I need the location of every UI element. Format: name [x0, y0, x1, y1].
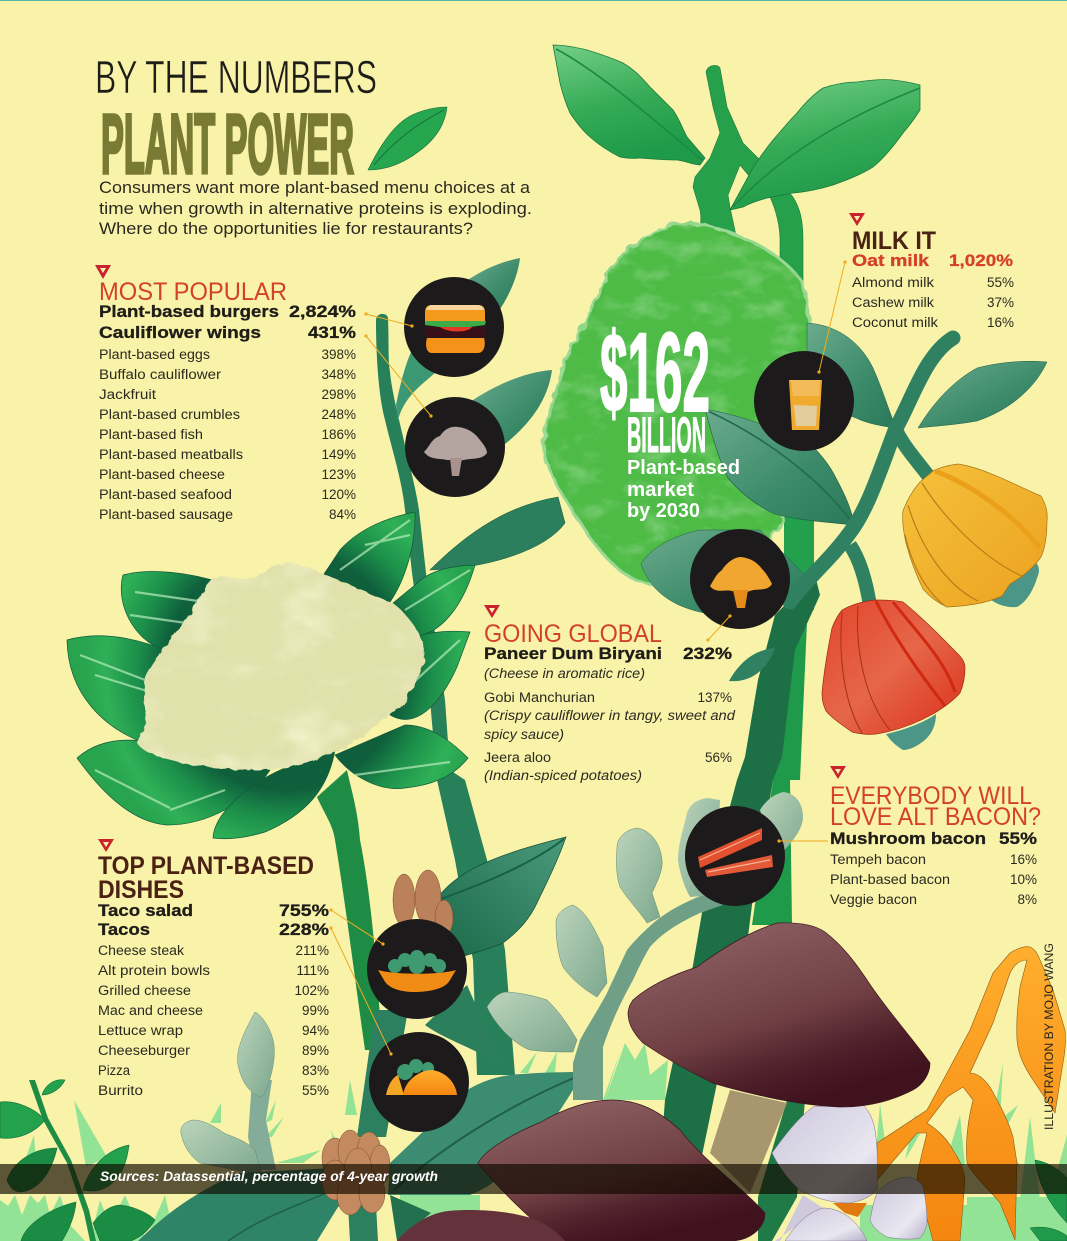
rows: Buffalo cauliflower	[99, 367, 222, 382]
leaf behind cauliflower icon	[470, 370, 552, 448]
kicker: by the numbers: BY THE NUMBERS	[95, 51, 377, 103]
rows	[852, 251, 1014, 330]
rows: Plant-based meatballs	[99, 447, 243, 462]
marker triangle	[830, 766, 846, 779]
rows	[98, 901, 329, 1098]
cauliflower head	[137, 563, 425, 770]
pine cone upper	[393, 870, 453, 936]
lower green stem	[784, 500, 814, 610]
heading: GOING GLOBAL	[484, 620, 662, 648]
big mushroom	[628, 923, 930, 1193]
illustration credit: ILLUSTRATION BY MOJO WANG	[1042, 943, 1056, 1130]
rows: Plant-based burgers	[99, 302, 279, 321]
sage leaf d	[678, 798, 720, 897]
pine cone lower	[322, 1130, 390, 1215]
rows: Alt protein bowls	[98, 963, 210, 978]
intro text: Where do the opportunities lie for restaurants?	[99, 219, 473, 238]
marker triangle	[98, 839, 114, 852]
rows: 755%	[279, 901, 329, 920]
rows: 228%	[279, 920, 329, 939]
rows: Plant-based cheese	[99, 467, 225, 482]
rows: 55%	[999, 829, 1037, 848]
rows: Pizza	[98, 1063, 130, 1078]
rows: (Crispy cauliflower in tangy, sweet and	[484, 708, 736, 723]
rows: Cheeseburger	[98, 1043, 191, 1058]
rows: 137%	[697, 690, 732, 705]
rows: 111%	[296, 963, 329, 978]
plant: top green sprout with stems	[553, 45, 920, 610]
rows: Plant-based crumbles	[99, 407, 240, 422]
rows: 55%	[987, 275, 1014, 290]
right edge leaves	[1030, 1160, 1067, 1241]
white mushrooms	[772, 1105, 927, 1241]
heading	[830, 782, 1041, 831]
marker triangle	[95, 265, 111, 279]
leaf behind burger icon	[465, 258, 520, 312]
lower stem	[317, 770, 382, 1050]
rows: 83%	[302, 1063, 329, 1078]
rows: 89%	[302, 1043, 329, 1058]
rows: Coconut milk	[852, 315, 938, 330]
rows: spicy sauce)	[484, 727, 564, 742]
rows: 232%	[683, 644, 732, 663]
rows: Jeera aloo	[484, 750, 551, 765]
caption	[627, 457, 740, 522]
rows: Lettuce wrap	[98, 1023, 183, 1038]
plant: leaf crossing patty edge	[430, 497, 565, 570]
heading: LOVE ALT BACON?	[830, 803, 1041, 831]
rows: Plant-based fish	[99, 427, 203, 442]
stems behind mushrooms	[758, 1100, 805, 1241]
intro text: time when growth in alternative proteins is exploding.	[99, 199, 532, 218]
rows: 56%	[705, 750, 732, 765]
rows: 1,020%	[949, 251, 1013, 270]
rows: 248%	[321, 407, 356, 422]
leaf: bottom left	[138, 1165, 395, 1241]
fruit: red	[822, 600, 965, 750]
icon: burger	[404, 277, 504, 377]
rows: Cashew milk	[852, 295, 934, 310]
small leaf	[729, 648, 775, 681]
rows: (Indian-spiced potatoes)	[484, 768, 642, 783]
fruit: yellow	[903, 464, 1047, 607]
plant: teal branch behind burger icons	[376, 258, 552, 1075]
top right leaf	[730, 80, 920, 210]
heading: MOST POPULAR	[99, 278, 287, 306]
panel: going global	[484, 605, 736, 783]
rows: Mushroom bacon	[830, 829, 986, 848]
intro text: Consumers want more plant-based menu choices at a	[99, 178, 531, 197]
panel: top plant-based dishes	[98, 839, 329, 1098]
marker triangle	[484, 605, 500, 618]
caption: by 2030	[627, 500, 700, 522]
rows: (Cheese in aromatic rice)	[484, 666, 645, 681]
leaf: right lower	[388, 1072, 583, 1195]
rows: 55%	[302, 1083, 329, 1098]
heading: DISHES	[98, 876, 184, 904]
leaf highlights	[80, 520, 470, 810]
rows: 2,824%	[289, 302, 356, 321]
leaf: middle	[425, 985, 503, 1067]
heading	[98, 852, 314, 904]
rows: 120%	[321, 487, 356, 502]
rows: 16%	[987, 315, 1014, 330]
source band	[0, 1164, 1067, 1194]
rows: 149%	[321, 447, 356, 462]
rows: 8%	[1017, 892, 1037, 907]
sage leaf b	[556, 905, 607, 997]
rows: Cheese steak	[98, 943, 184, 958]
green patty	[543, 223, 815, 590]
leaf A	[807, 323, 896, 428]
rows: 398%	[321, 347, 356, 362]
icon: taco salad	[367, 919, 467, 1019]
leaf B	[918, 361, 1047, 428]
callout: $162 billion: $162	[600, 310, 710, 435]
teal stem under icons	[348, 1010, 408, 1241]
heading: EVERYBODY WILL	[830, 782, 1032, 810]
ground and grass	[0, 1043, 1067, 1241]
source text: Sources: Datassential, percentage of 4-year growth	[100, 1169, 438, 1184]
rows: 84%	[329, 507, 356, 522]
rows: 211%	[295, 943, 329, 958]
dark leaves at lower center	[138, 837, 583, 1241]
heading: TOP PLANT-BASED	[98, 852, 314, 880]
rows: Tacos	[98, 920, 150, 939]
icon: cauliflower grey	[405, 397, 505, 497]
caption: market	[627, 479, 694, 501]
rows: Plant-based eggs	[99, 347, 210, 362]
panel: milk it	[849, 213, 1014, 330]
icon: title leaf	[368, 107, 447, 170]
second mushroom	[478, 1100, 765, 1241]
rows: 94%	[302, 1023, 329, 1038]
icon: bacon	[685, 806, 785, 906]
sage sprout, left	[181, 1012, 276, 1175]
rows: 431%	[308, 323, 356, 342]
rows	[830, 829, 1037, 907]
sage leaf e	[760, 792, 803, 860]
sage branch, center	[487, 792, 803, 1100]
rows: Mac and cheese	[98, 1003, 203, 1018]
rows: Paneer Dum Biryani	[484, 644, 662, 663]
connector lines	[329, 260, 847, 1056]
third mushroom	[397, 1210, 565, 1241]
rows: Plant-based sausage	[99, 507, 233, 522]
leaf: upper	[438, 837, 566, 957]
rows: 37%	[987, 295, 1014, 310]
icon: glass of oat milk	[754, 351, 854, 451]
rows: Plant-based seafood	[99, 487, 232, 502]
sage leaf c	[487, 992, 577, 1052]
icon: cauliflower orange	[690, 529, 790, 629]
callout: $162 billion: BILLION	[627, 407, 706, 463]
top left leaf	[553, 45, 705, 165]
bright strip	[752, 596, 808, 925]
intro text	[99, 178, 532, 238]
rows: Oat milk	[852, 251, 930, 270]
heading: MILK IT	[852, 227, 936, 255]
callout: $162 billion	[600, 310, 740, 522]
sprout stem	[693, 65, 803, 300]
rows: 298%	[321, 387, 356, 402]
icon: taco	[369, 1032, 469, 1132]
text: PLANT POWER	[101, 97, 354, 191]
leaves	[67, 512, 475, 839]
plant: right teal branch and leaves	[641, 323, 1047, 1165]
panel: alt bacon	[830, 766, 1041, 907]
rows: Plant-based bacon	[830, 872, 950, 887]
orange plant	[833, 947, 1065, 1241]
dark stem	[660, 575, 820, 1165]
rows: Gobi Manchurian	[484, 690, 595, 705]
fruit stalks	[850, 432, 930, 606]
rows: Jackfruit	[99, 387, 156, 402]
rows: 348%	[321, 367, 356, 382]
rows: 102%	[294, 983, 329, 998]
leaf C	[705, 409, 854, 525]
rows	[99, 302, 356, 522]
leaf: small dark	[390, 1195, 431, 1241]
cauliflower with leaves	[67, 512, 475, 1050]
teal stem	[790, 338, 953, 602]
leaf D	[641, 530, 814, 615]
rows: 186%	[321, 427, 356, 442]
rows: Burrito	[98, 1083, 143, 1098]
rows	[484, 644, 736, 783]
rows: 16%	[1010, 852, 1037, 867]
rows: Taco salad	[98, 901, 193, 920]
bottom left small plant	[0, 1080, 155, 1241]
marker triangle	[849, 213, 865, 226]
rows: 99%	[302, 1003, 329, 1018]
panel: most popular	[95, 265, 356, 522]
rows: Grilled cheese	[98, 983, 191, 998]
rows: Cauliflower wings	[99, 323, 261, 342]
rows: Almond milk	[852, 275, 934, 290]
caption: Plant-based	[627, 457, 740, 479]
rows: Veggie bacon	[830, 892, 917, 907]
rows: 10%	[1010, 872, 1037, 887]
rows: Tempeh bacon	[830, 852, 926, 867]
rows: 123%	[321, 467, 356, 482]
sage leaf a	[616, 828, 662, 923]
